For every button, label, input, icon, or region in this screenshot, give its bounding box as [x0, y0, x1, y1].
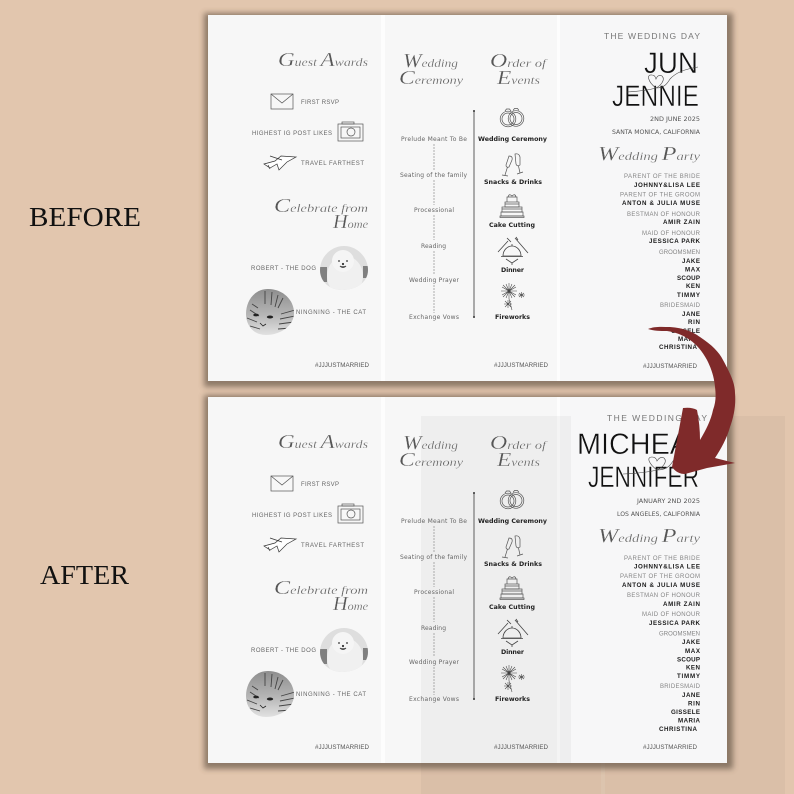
heading: wedding ceremony: Wedding — [403, 432, 458, 454]
heading: celebrate from home: Home — [332, 593, 369, 615]
party list: CHRISTINA — [659, 344, 698, 351]
panel: wedding party after — [577, 413, 707, 751]
party list: BRIDESMAID — [660, 303, 701, 309]
party list: TIMMY — [677, 673, 701, 680]
events timeline — [473, 110, 475, 318]
ceremony steps: Processional — [414, 207, 454, 214]
icon: fireworks — [501, 665, 525, 692]
icon: airplane — [264, 538, 296, 552]
heading: celebrate from home — [274, 195, 369, 233]
party list: PARENT OF THE BRIDE — [624, 174, 700, 180]
date and place: JANUARY 2ND 2025 — [636, 498, 700, 505]
heading: celebrate from home: Home — [332, 211, 369, 233]
heading: celebrate from home: Celebrate from — [274, 195, 368, 217]
ceremony steps: Exchange Vows — [409, 696, 459, 703]
icon: champagne glasses — [502, 536, 523, 558]
wedding ceremony event: Wedding Ceremony — [478, 136, 547, 143]
party list: MAID OF HONOUR — [642, 612, 701, 618]
highest likes: HIGHEST IG POST LIKES — [252, 513, 332, 519]
before label: BEFORE — [29, 202, 141, 232]
party list — [620, 556, 701, 733]
after label: AFTER — [40, 560, 129, 590]
robert label: ROBERT - THE DOG — [251, 648, 316, 654]
party list: CHRISTINA — [659, 726, 698, 733]
before brochure — [204, 13, 733, 387]
party list: JOHNNY&LISA LEE — [634, 182, 700, 189]
panel: wedding party before — [598, 31, 701, 370]
party list: GISSELE — [671, 328, 700, 335]
translucent overlay on background — [421, 416, 785, 794]
fireworks event: Fireworks — [495, 696, 530, 703]
dog photo — [318, 626, 370, 678]
names: JENNIE — [612, 80, 699, 113]
arrow — [648, 327, 735, 474]
icon: dinner — [498, 619, 528, 647]
icon: rings — [500, 490, 524, 509]
hashtag: #JJJUSTMARRIED — [494, 362, 549, 369]
icon: envelope — [271, 476, 293, 491]
party list: JESSICA PARK — [649, 620, 701, 627]
heading: wedding party: W edding Party — [598, 143, 701, 165]
events timeline — [473, 492, 475, 700]
heading: wedding ceremony — [399, 432, 464, 471]
party list: JOHNNY&LISA LEE — [634, 564, 700, 570]
heading: celebrate from home — [274, 577, 369, 615]
ceremony steps: Seating of the family — [400, 554, 467, 561]
hashtag: #JJJUSTMARRIED — [643, 744, 698, 751]
panel: guest awards after — [244, 431, 370, 751]
party list: BESTMAN OF HONOUR — [627, 212, 701, 218]
snacks event: Snacks & Drinks — [484, 561, 542, 568]
party list: ANTON & JULIA MUSE — [622, 200, 700, 207]
party list: MAX — [685, 648, 701, 655]
party list: MAX — [685, 266, 701, 274]
heading: order of events: Order of — [490, 50, 548, 72]
party list: PARENT OF THE BRIDE — [624, 556, 700, 562]
hashtag: #JJJUSTMARRIED — [494, 744, 549, 751]
heading: guest awards: Guest Awards — [278, 431, 368, 453]
panel: ceremony and events before — [399, 50, 549, 369]
travel farthest: TRAVEL FARTHEST — [301, 161, 364, 167]
icon: airplane — [264, 156, 296, 170]
ceremony steps: Seating of the family — [400, 172, 467, 179]
party list: JANE — [682, 692, 700, 699]
after brochure — [204, 395, 733, 769]
ceremony steps: Processional — [414, 589, 454, 596]
ceremony steps — [400, 136, 467, 321]
heading: wedding ceremony: Ceremony — [399, 449, 464, 471]
first rsvp: FIRST RSVP — [301, 100, 339, 106]
party list: JANE — [682, 311, 700, 318]
names — [612, 47, 699, 113]
icon: envelope — [271, 94, 293, 109]
the wedding day: THE WEDDING DAY — [604, 31, 700, 41]
ningning label: NINGNING - THE CAT — [296, 692, 366, 698]
snacks event: Snacks & Drinks — [484, 179, 542, 186]
cat photo — [244, 287, 296, 337]
party list: PARENT OF THE GROOM — [620, 192, 700, 198]
the wedding day: THE WEDDING DAY — [607, 413, 707, 423]
party list: GISSELE — [671, 709, 700, 716]
names: JENNIFER — [588, 461, 699, 494]
party list: KEN — [686, 283, 701, 290]
ceremony steps — [400, 518, 467, 703]
panel: ceremony and events after — [399, 432, 549, 751]
ceremony steps: Reading — [421, 243, 446, 250]
party list: JAKE — [682, 258, 700, 265]
names — [577, 428, 705, 494]
highest likes: HIGHEST IG POST LIKES — [252, 131, 332, 137]
heading: order of events: Events — [496, 449, 540, 471]
party list: ANTON & JULIA MUSE — [622, 582, 700, 589]
date and place: 2ND JUNE 2025 — [650, 116, 700, 123]
party list: AMIR ZAIN — [663, 601, 701, 608]
party list: JAKE — [682, 639, 700, 646]
heading: wedding ceremony: Wedding — [403, 50, 458, 72]
party list: AMIR ZAIN — [663, 219, 701, 226]
ceremony steps: Prelude Meant To Be — [401, 518, 467, 525]
icon: cake — [500, 577, 524, 600]
panel: guest awards before — [244, 49, 370, 369]
heading: order of events: Order of — [490, 432, 548, 454]
cake event: Cake Cutting — [489, 222, 535, 229]
ceremony steps: Wedding Prayer — [409, 659, 460, 666]
date and place — [617, 498, 701, 518]
heading: wedding ceremony — [399, 50, 464, 89]
heading: wedding ceremony: Ceremony — [399, 67, 464, 89]
cake event: Cake Cutting — [489, 604, 535, 611]
party list: MARIA — [678, 718, 701, 724]
names: MICHEAL — [577, 428, 705, 461]
dinner event: Dinner — [501, 649, 525, 656]
date and place: SANTA MONICA, CALIFORNIA — [612, 129, 701, 136]
party list — [620, 174, 701, 351]
cat photo — [244, 669, 296, 719]
icon: camera — [338, 504, 363, 523]
party list: SCOUP — [677, 656, 700, 664]
heading: order of events: Events — [496, 67, 540, 89]
party list: RIN — [688, 700, 701, 708]
first rsvp: FIRST RSVP — [301, 482, 339, 488]
icon: rings — [500, 108, 524, 127]
ceremony steps: Reading — [421, 625, 446, 632]
heading: wedding party: W edding Party — [598, 525, 701, 547]
ceremony steps: Wedding Prayer — [409, 277, 460, 284]
party list: TIMMY — [677, 292, 701, 299]
dinner event: Dinner — [501, 267, 525, 274]
ceremony timeline — [433, 526, 435, 695]
icon: dinner — [498, 237, 528, 265]
party list: RIN — [688, 319, 701, 326]
ceremony steps: Prelude Meant To Be — [401, 136, 467, 143]
ceremony timeline — [433, 144, 435, 313]
icon: cake — [500, 195, 524, 218]
hashtag: #JJJUSTMARRIED — [315, 362, 370, 369]
party list: GROOMSMEN — [659, 250, 700, 256]
heading: order of events — [490, 50, 548, 89]
heading: celebrate from home: Celebrate from — [274, 577, 368, 599]
heading: guest awards: Guest Awards — [278, 49, 368, 71]
party list: SCOUP — [677, 275, 700, 282]
heading: order of events — [490, 432, 548, 471]
icon: champagne glasses — [502, 154, 523, 176]
party list: BESTMAN OF HONOUR — [627, 593, 701, 599]
party list: KEN — [686, 664, 701, 672]
hashtag: #JJJUSTMARRIED — [315, 744, 370, 751]
party list: MAID OF HONOUR — [642, 231, 701, 237]
icon: camera — [338, 122, 363, 141]
ningning label: NINGNING - THE CAT — [296, 310, 366, 316]
fireworks event: Fireworks — [495, 314, 530, 321]
icon: fireworks — [501, 283, 525, 310]
party list: BRIDESMAID — [660, 684, 701, 690]
date and place — [612, 116, 701, 136]
names: JUN — [644, 47, 698, 80]
date and place: LOS ANGELES, CALIFORNIA — [617, 511, 701, 518]
dog photo — [318, 244, 370, 296]
hashtag: #JJJUSTMARRIED — [643, 363, 698, 370]
party list: GROOMSMEN — [659, 632, 700, 638]
party list: JESSICA PARK — [649, 238, 701, 245]
ceremony steps: Exchange Vows — [409, 314, 459, 321]
robert label: ROBERT - THE DOG — [251, 266, 316, 272]
party list: PARENT OF THE GROOM — [620, 574, 700, 580]
travel farthest: TRAVEL FARTHEST — [301, 543, 364, 549]
party list: MARIA — [678, 336, 701, 343]
wedding ceremony event: Wedding Ceremony — [478, 518, 547, 525]
